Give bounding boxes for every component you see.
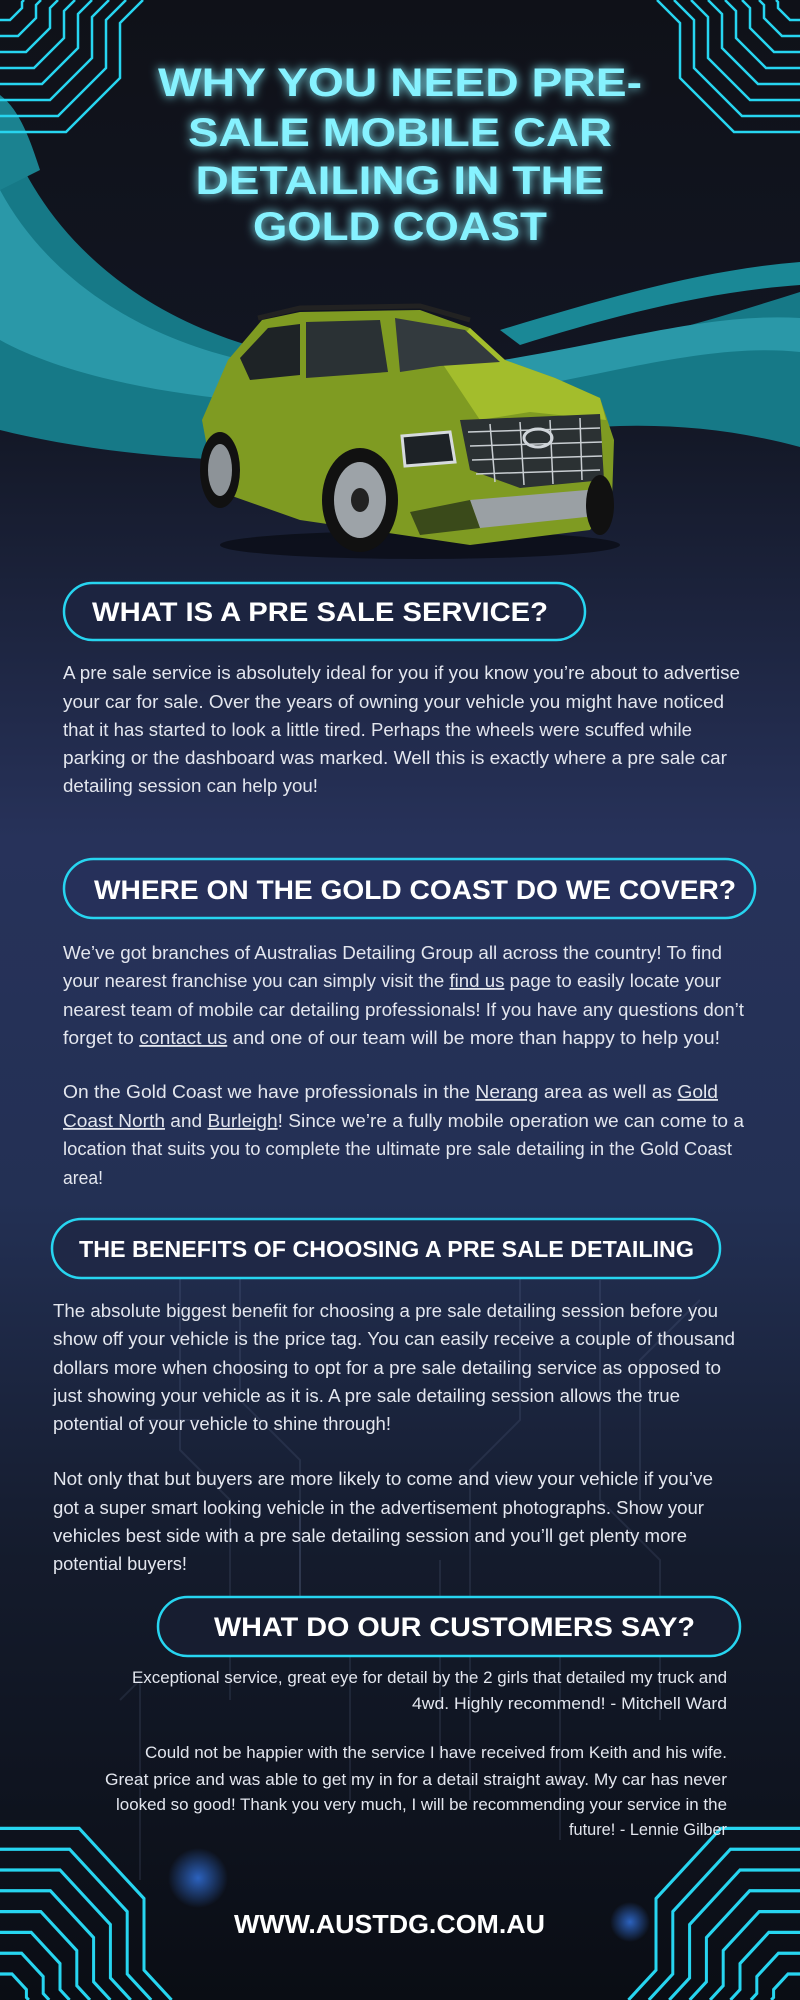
testimonial: Mitchell Ward: 4wd. Highly recommend! - Mitchell Ward (412, 1695, 727, 1713)
title: SALE MOBILE CAR (188, 111, 612, 155)
corner: top left (0, 0, 143, 132)
circuit background (120, 1230, 700, 1880)
corner: top right (657, 0, 800, 132)
title: GOLD COAST (253, 205, 547, 249)
testimonial: Lennie Gilber: Great price and was able to get my in for a detail straight away. My car has never (105, 1771, 728, 1789)
text: benefits paragraph 2: potential buyers! (53, 1554, 187, 1574)
text: coverage paragraph 1 (63, 943, 744, 1048)
pill: benefits (52, 1219, 720, 1278)
text: pre sale service paragraph: your car for sale. Over the years of owning your vehicle you might have noticed (63, 692, 724, 712)
text: benefits paragraph 1: dollars more when choosing to opt for a pre sale detailing service as opposed to (53, 1358, 721, 1378)
text: benefits paragraph 1: The absolute biggest benefit for choosing a pre sale detailing session before you (53, 1301, 718, 1321)
text: coverage paragraph 2: On the Gold Coast we have professionals in the Nerang area as well as Gold (63, 1082, 718, 1102)
text: coverage paragraph 1: We’ve got branches of Australias Detailing Group all across the country! To find (63, 943, 722, 963)
testimonial: Lennie Gilber (105, 1744, 728, 1839)
text: pre sale service paragraph: detailing session can help you! (63, 776, 318, 796)
title: WHY YOU NEED PRE- (158, 61, 642, 105)
testimonial: Lennie Gilber: Could not be happier with the service I have received from Keith and his wife. (145, 1744, 727, 1762)
text: coverage paragraph 2: Coast North and Burleigh! Since we’re a fully mobile operation we can come to a (63, 1111, 745, 1131)
pill: what is a pre sale service (64, 583, 585, 640)
text: benefits paragraph 2: vehicles best side with a pre sale detailing session and you’ll get plenty more (53, 1526, 687, 1546)
text: pre sale service paragraph: A pre sale service is absolutely ideal for you if you know you’re about to advertise (63, 663, 740, 683)
text: coverage paragraph 2 (63, 1082, 745, 1188)
text: benefits paragraph 1 (52, 1301, 735, 1434)
pill: where on the gold coast: WHERE ON THE GOLD COAST DO WE COVER? (94, 875, 736, 905)
title: DETAILING IN THE (196, 159, 604, 203)
text: coverage paragraph 1: nearest team of mobile car detailing professionals! If you have any questions don’t (63, 1000, 744, 1020)
text: pre sale service paragraph: parking or the dashboard was marked. Well this is exactly where a pre sale car (63, 748, 727, 768)
text: benefits paragraph 2: got a super smart looking vehicle in the advertisement photographs. Show your (53, 1498, 704, 1518)
corner: bottom left (0, 1828, 172, 2000)
text: coverage paragraph 1: your nearest franchise you can simply visit the find us page to easily locate your (63, 971, 721, 991)
title (158, 61, 642, 249)
text: benefits paragraph 1: potential of your vehicle to shine through! (53, 1414, 391, 1434)
pill: benefits: THE BENEFITS OF CHOOSING A PRE SALE DETAILING (79, 1236, 694, 1262)
testimonial: Mitchell Ward: Exceptional service, great eye for detail by the 2 girls that detailed my truck and (132, 1669, 727, 1687)
glow dots (168, 1848, 650, 1942)
testimonial: Lennie Gilber: looked so good! Thank you very much, I will be recommending your service in the (116, 1796, 727, 1814)
corner: bottom right (628, 1828, 800, 2000)
car image (200, 306, 620, 559)
text: benefits paragraph 2 (53, 1469, 713, 1574)
text: pre sale service paragraph (63, 663, 740, 796)
pill: what is a pre sale service: WHAT IS A PRE SALE SERVICE? (92, 597, 548, 627)
pill: where on the gold coast (64, 859, 755, 918)
waves (0, 95, 800, 461)
text: coverage paragraph 1: forget to contact us and one of our team will be more than happy to help you! (63, 1028, 720, 1048)
text: coverage paragraph 2: location that suits you to complete the ultimate pre sale detailing in the Gold Coast (63, 1139, 732, 1159)
text: benefits paragraph 2: Not only that but buyers are more likely to come and view your vehicle if you’ve (53, 1469, 713, 1489)
pill: customers: WHAT DO OUR CUSTOMERS SAY? (214, 1612, 695, 1642)
testimonial: Mitchell Ward (132, 1669, 727, 1713)
text: benefits paragraph 1: show off your vehicle is the price tag. You can easily receive a couple of thousand (53, 1329, 735, 1349)
text: pre sale service paragraph: that it has started to look a little tired. Perhaps the wheels were scuffed while (63, 720, 692, 740)
text: coverage paragraph 2: area! (63, 1168, 103, 1188)
text: benefits paragraph 1: just showing your vehicle as it is. A pre sale detailing session allows the true (52, 1386, 680, 1406)
testimonial: Lennie Gilber: future! - Lennie Gilber (569, 1821, 727, 1839)
pill: customers (158, 1597, 740, 1656)
website url: WWW.AUSTDG.COM.AU (234, 1909, 545, 1939)
